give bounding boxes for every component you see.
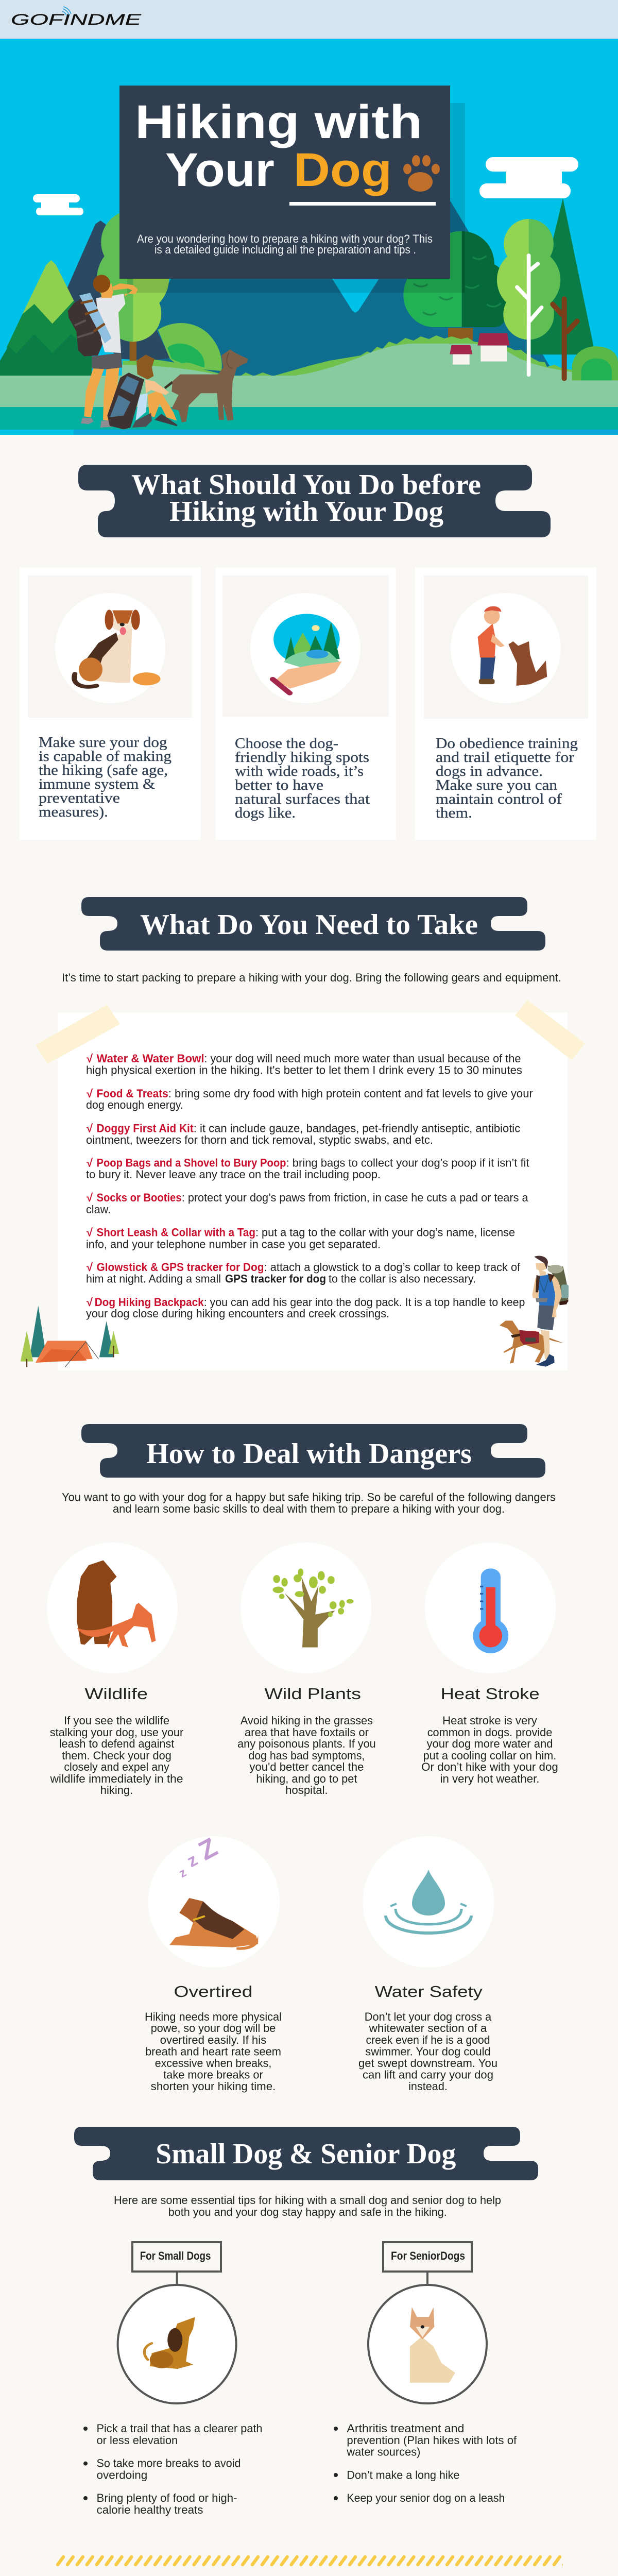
item: socks: : protect your dog’s paws from friction, in case he cuts a pad or tears a <box>182 1191 528 1204</box>
icon: senior dog <box>410 2307 455 2383</box>
card text <box>235 735 370 821</box>
description: Heat stroke is very <box>442 1714 537 1727</box>
card text: is capable of making <box>39 748 171 765</box>
icon: paw <box>403 155 440 192</box>
card text: Do obedience training <box>436 735 578 752</box>
panel: packing checklist <box>21 1000 585 1370</box>
item: leash <box>86 1226 515 1251</box>
description: overtired easily. If his <box>160 2033 266 2046</box>
item: leash: √ <box>87 1226 93 1239</box>
bullet list: or less elevation <box>97 2434 178 2447</box>
description: your dog more water and <box>426 1737 553 1750</box>
card text: dogs in advance. <box>436 763 543 779</box>
card text: Choose the dog- <box>235 735 338 752</box>
main title <box>135 96 422 196</box>
item: first aid <box>86 1122 520 1146</box>
standing hiker <box>68 275 138 428</box>
section heading: small and senior dog <box>74 2127 538 2180</box>
right scenery <box>403 198 595 354</box>
label box <box>383 2242 472 2272</box>
bullet list: Keep your senior dog on a leash <box>347 2492 505 2504</box>
card text: immune system & <box>39 776 155 792</box>
bullet list <box>83 2422 263 2516</box>
description: them. Check your dog <box>62 1749 171 1762</box>
item: leash: : put a tag to the collar with your dog’s name, license <box>255 1226 515 1239</box>
card text: the hiking (safe age, <box>39 762 168 778</box>
heading: Heat Stroke <box>441 1685 540 1703</box>
icon: small dog <box>144 2317 195 2369</box>
logo: GoFindMe: GOFINDME <box>11 11 142 28</box>
section heading: before hiking <box>78 465 551 537</box>
item: socks: claw. <box>86 1203 111 1216</box>
section heading: before hiking: What Should You Do before <box>131 469 481 501</box>
item: poop bags: to bury it. Never leave any trace on the trail including poop. <box>86 1168 381 1181</box>
item: socks <box>86 1191 528 1216</box>
main title: Your <box>165 144 274 196</box>
description: common in dogs. provide <box>427 1726 552 1739</box>
icon: bear and fox <box>77 1560 156 1648</box>
hero dog <box>165 349 248 422</box>
description <box>421 1714 558 1785</box>
icon: hand holding landscape <box>273 614 342 693</box>
item: socks: Socks or Booties <box>97 1191 181 1204</box>
description: Avoid hiking in the grasses <box>241 1714 373 1727</box>
card: dog-friendly spots <box>216 567 396 840</box>
description: If you see the wildlife <box>64 1714 169 1727</box>
description: any poisonous plants. If you <box>237 1737 376 1750</box>
description: in very hot weather. <box>440 1772 540 1785</box>
danger: wild plants <box>237 1543 376 1797</box>
description: leash to defend against <box>59 1737 174 1750</box>
icon: resting dog <box>169 1898 258 1950</box>
description: dog has bad symptoms, <box>248 1749 365 1762</box>
bullet list: overdoing <box>97 2468 147 2481</box>
description: take more breaks or <box>163 2068 263 2081</box>
description: shorten your hiking time. <box>151 2080 276 2093</box>
label box: For SeniorDogs <box>391 2249 465 2262</box>
icon: zzz: Z <box>194 1832 222 1867</box>
description: whitewater section of a <box>369 2022 487 2035</box>
heading: Wild Plants <box>265 1685 361 1703</box>
item: glowstick: Glowstick & GPS tracker for Dog <box>97 1261 264 1274</box>
description <box>49 1714 183 1797</box>
intro text: small and senior <box>114 2194 501 2218</box>
item: first aid: ointment, tweezers for thorn and tick removal, styptic swabs, and etc. <box>86 1133 433 1146</box>
item: food: √ <box>87 1087 93 1100</box>
item: backpack <box>86 1296 525 1320</box>
description: Don’t let your dog cross a <box>365 2010 492 2023</box>
item: water: : your dog will need much more water than usual because of the <box>204 1052 521 1065</box>
icon: trainer and dog <box>478 606 547 686</box>
section heading: small and senior dog: Small Dog & Senior Dog <box>156 2138 456 2170</box>
card text: with wide roads, it’s <box>235 763 364 779</box>
item: poop bags <box>86 1156 529 1181</box>
label box <box>132 2242 221 2272</box>
left mountains, tree, navy peak <box>0 210 241 381</box>
item: socks: √ <box>87 1191 93 1204</box>
danger: heat stroke <box>421 1543 558 1785</box>
item: glowstick <box>86 1261 521 1285</box>
description: hiking, and go to pet <box>256 1772 357 1785</box>
card text: them. <box>436 805 472 821</box>
card text: friendly hiking spots <box>235 749 369 766</box>
intro text: packing: It’s time to start packing to prepare a hiking with your dog. Bring the following gears and equipment. <box>62 971 561 984</box>
card text: better to have <box>235 777 323 793</box>
danger: water safety <box>358 1836 497 2093</box>
heading: Water Safety <box>375 1982 483 2001</box>
heading: Wildlife <box>84 1685 148 1703</box>
column: senior dogs <box>334 2242 517 2504</box>
description: get swept downstream. You <box>358 2057 497 2070</box>
item: glowstick: to the collar is also necessary. <box>329 1273 476 1285</box>
item: food: Food & Treats <box>97 1087 168 1100</box>
intro text: small and senior: both you and your dog stay happy and safe in the hiking. <box>168 2206 447 2218</box>
item: backpack: : you can add his gear into the dog pack. It is a top handle to keep <box>204 1296 525 1309</box>
icon: thermometer <box>473 1568 508 1653</box>
description: powe, so your dog will be <box>151 2022 276 2035</box>
teal mountain <box>154 118 551 379</box>
subtitle <box>137 232 433 256</box>
intro text: dangers: and learn some basic skills to deal with them to prepare a hiking with your dog. <box>113 1502 505 1515</box>
intro text: dangers: You want to go with your dog for a happy but safe hiking trip. So be careful of the following dangers <box>62 1491 556 1504</box>
description: breath and heart rate seem <box>145 2045 281 2058</box>
item: water: high physical exertion in the hiking. It's better to let them I drink every 15 to 30 minutes <box>86 1064 522 1077</box>
description: swimmer. Your dog could <box>365 2045 491 2058</box>
item: poop bags: Poop Bags and a Shovel to Bury Poop <box>97 1156 286 1170</box>
main title: Hiking with <box>135 96 422 148</box>
intro text: dangers <box>62 1491 556 1515</box>
houses and trees <box>450 219 618 380</box>
bullet list: Bring plenty of food or high- <box>97 2492 237 2504</box>
bullet list <box>334 2422 517 2504</box>
item: poop bags: √ <box>87 1156 93 1170</box>
cloud left <box>33 194 83 215</box>
section heading: dangers: How to Deal with Dangers <box>146 1438 472 1470</box>
bullet list: Arthritis treatment and <box>347 2422 464 2435</box>
card text: measures). <box>39 804 108 820</box>
card text: and trail etiquette for <box>436 749 574 766</box>
icon: hiker with dog <box>500 1256 569 1367</box>
green hill <box>0 335 618 407</box>
item: backpack: Dog Hiking Backpack <box>95 1296 204 1309</box>
item: food: : bring some dry food with high protein content and fat levels to give your <box>168 1087 533 1100</box>
subtitle: Are you wondering how to prepare a hiking with your dog? This <box>137 232 433 245</box>
description <box>237 1714 376 1797</box>
item: water: Water & Water Bowl <box>97 1052 204 1065</box>
description: area that have foxtails or <box>245 1726 369 1739</box>
card text: dogs like. <box>235 805 296 821</box>
section heading: before hiking: Hiking with Your Dog <box>169 496 443 528</box>
danger: wildlife <box>47 1543 183 1797</box>
section heading: dangers <box>81 1424 545 1478</box>
icon: tent and trees <box>21 1306 119 1367</box>
hero people and dog <box>68 275 248 429</box>
item: leash: Short Leash & Collar with a Tag <box>97 1226 255 1239</box>
foreground strips <box>0 407 618 435</box>
main title: Dog <box>294 144 392 196</box>
item: first aid: Doggy First Aid Kit <box>97 1122 194 1134</box>
sitting hiker <box>107 354 178 429</box>
item: leash: info, and your telephone number in case you get separated. <box>86 1238 381 1251</box>
danger: overtired <box>145 1832 282 2093</box>
bullet list: So take more breaks to avoid <box>97 2457 241 2470</box>
item: water <box>86 1052 522 1077</box>
description: can lift and carry your dog <box>363 2068 493 2081</box>
card text: Make sure your dog <box>39 734 167 751</box>
description: hiking. <box>100 1784 133 1797</box>
description: creek even if he is a good <box>366 2033 490 2046</box>
bullet list: Pick a trail that has a clearer path <box>97 2422 263 2435</box>
label box: For Small Dogs <box>140 2249 211 2262</box>
icon: water drop and ripples <box>386 1870 471 1933</box>
card text: Make sure you can <box>436 777 558 793</box>
column: small dogs <box>83 2242 263 2516</box>
card: obedience training <box>415 567 596 840</box>
description: you'd better cancel the <box>249 1760 364 1773</box>
icon: zzz <box>177 1832 222 1880</box>
icon: zzz: z <box>177 1866 188 1880</box>
description: put a cooling collar on him. <box>423 1749 556 1762</box>
section heading: what to take: What Do You Need to Take <box>140 909 478 941</box>
card text <box>436 735 578 821</box>
icon: zzz: z <box>184 1850 201 1871</box>
item: first aid: √ <box>87 1122 93 1134</box>
bullet list: Don’t make a long hike <box>347 2468 459 2481</box>
card text: maintain control of <box>436 791 562 807</box>
header bar with logo <box>0 0 618 39</box>
icon: tree <box>273 1568 353 1647</box>
item: food <box>86 1087 533 1111</box>
item: glowstick: √ <box>87 1261 93 1274</box>
description: Or don’t hike with your dog <box>421 1760 558 1773</box>
item: poop bags: : bring bags to collect your dog’s poop if it isn’t fit <box>286 1156 529 1170</box>
subtitle: is a detailed guide including all the preparation and tips . <box>154 243 416 256</box>
card text: preventative <box>39 790 120 806</box>
item: glowstick: : attach a glowstick to a dog’s collar to keep track of <box>264 1261 521 1274</box>
card text: natural surfaces that <box>235 791 370 807</box>
item: food: dog enough energy. <box>86 1098 183 1111</box>
item: first aid: : it can include gauze, bandages, pet-friendly antiseptic, antibiotic <box>194 1122 520 1134</box>
hero illustration <box>0 39 618 435</box>
item: glowstick: GPS tracker for dog <box>225 1273 326 1285</box>
description: instead. <box>408 2080 448 2093</box>
description: stalking your dog, use your <box>50 1726 183 1739</box>
card text <box>39 734 171 820</box>
description <box>145 2010 282 2093</box>
bullet list: prevention (Plan hikes with lots of <box>347 2434 517 2447</box>
description: Hiking needs more physical <box>145 2010 282 2023</box>
description <box>358 2010 497 2093</box>
bullet list: water sources) <box>346 2446 420 2459</box>
logo: GoFindMe <box>11 7 142 28</box>
item: backpack: √ <box>87 1296 93 1309</box>
section heading: what to take <box>81 897 545 951</box>
heading: Overtired <box>174 1982 252 2001</box>
description: closely and expel any <box>64 1760 169 1773</box>
item: glowstick: him at night. Adding a small <box>86 1273 221 1285</box>
cloud right <box>479 157 578 198</box>
title panel <box>119 86 465 293</box>
bullet list: calorie healthy treats <box>97 2503 203 2516</box>
item: backpack: your dog close during hiking encounters and creek crossings. <box>86 1307 389 1320</box>
item: water: √ <box>87 1052 93 1065</box>
icon: sitting dog with frisbee <box>74 609 160 687</box>
description: excessive when breaks, <box>155 2057 271 2070</box>
description: wildlife immediately in the <box>49 1772 183 1785</box>
intro text: small and senior: Here are some essential tips for hiking with a small dog and senior dog to help <box>114 2194 501 2207</box>
description: hospital. <box>285 1784 328 1797</box>
card: capable dog <box>20 567 201 840</box>
